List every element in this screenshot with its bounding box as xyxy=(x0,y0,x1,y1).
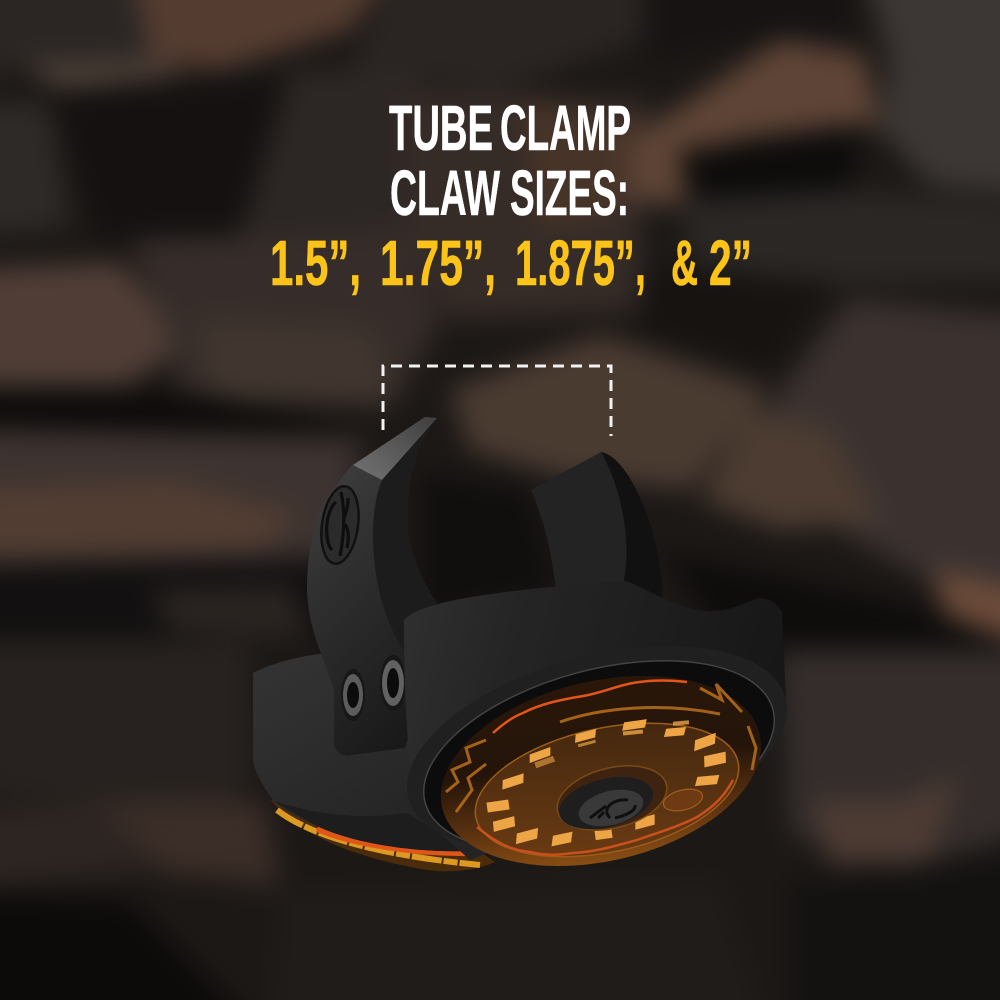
size list xyxy=(270,227,752,299)
right claw xyxy=(531,452,663,600)
red lens emblem xyxy=(661,785,705,815)
hex bolt 2 xyxy=(380,655,406,711)
size list: 2” xyxy=(709,227,752,299)
product: tube clamp light xyxy=(253,417,809,895)
lit facet near tip xyxy=(353,417,437,480)
main housing xyxy=(404,581,786,860)
orange light pipe xyxy=(493,681,687,733)
rear lower lens xyxy=(271,800,495,871)
inner LED disc xyxy=(463,701,751,879)
amber lens xyxy=(422,647,780,895)
housing bezel xyxy=(385,609,809,887)
centre hub with KC logo xyxy=(550,755,674,841)
dashed bracket showing tube diameter xyxy=(383,366,611,436)
size list: 1.875”, xyxy=(515,227,646,299)
left claw with KC logo and bolts xyxy=(307,417,445,756)
heading line 1: TUBE xyxy=(389,92,493,164)
lower red rim light xyxy=(477,780,733,855)
rear puck housing xyxy=(253,653,470,851)
KC logo badge xyxy=(317,484,363,566)
heading line 2: SIZES: xyxy=(510,157,629,229)
LED ring xyxy=(486,719,726,846)
heading line 2: CLAW xyxy=(390,157,500,229)
heading line 1: CLAMP xyxy=(500,92,631,164)
hex bolt 1 xyxy=(341,669,365,721)
title: tube clamp claw sizes xyxy=(270,92,752,299)
size list: 1.5”, xyxy=(270,227,361,299)
size list: 1.75”, xyxy=(380,227,496,299)
inner dark face of claw xyxy=(373,418,445,655)
amber jewel reflections xyxy=(446,684,756,812)
size list: & xyxy=(671,227,698,299)
rear puck lower step xyxy=(273,801,470,851)
